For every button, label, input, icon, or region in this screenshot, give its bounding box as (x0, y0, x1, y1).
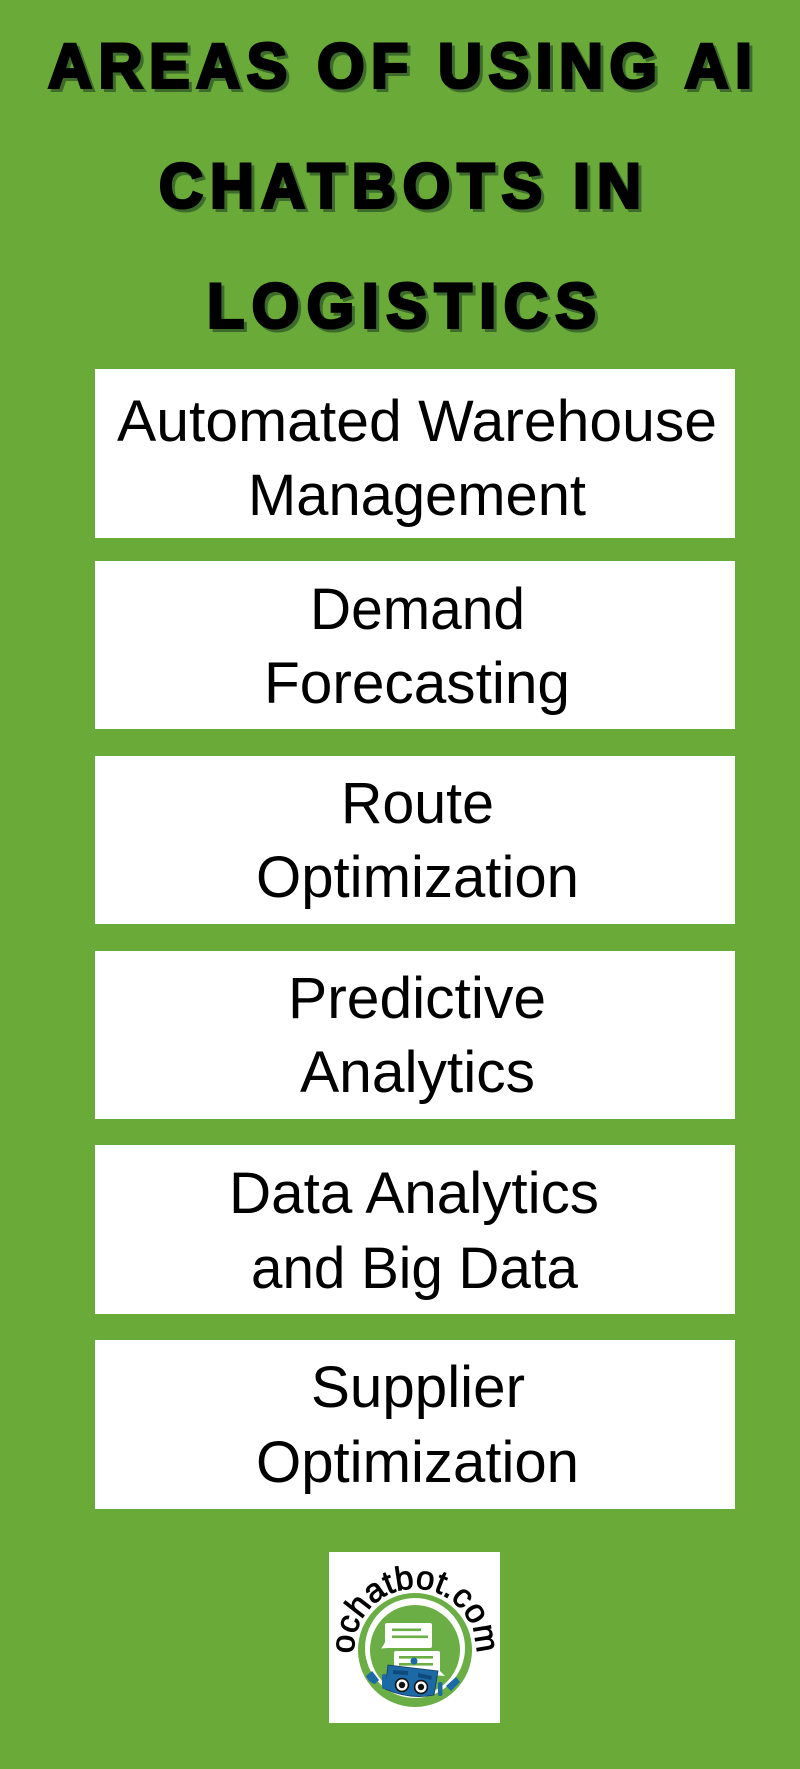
title: CHATBOTS IN (159, 151, 641, 222)
logo wordmark: ochatbot.com (336, 1566, 494, 1652)
panel: automated warehouse management: Management (248, 463, 586, 528)
panel: data analytics and big data: and Big Data (251, 1236, 579, 1301)
chat bubble top (381, 1623, 432, 1648)
panel: supplier optimization: Optimization (256, 1430, 579, 1495)
panel: predictive analytics (95, 951, 735, 1119)
panel: route optimization (95, 756, 735, 924)
panel: route optimization: Route (341, 771, 494, 836)
panel: predictive analytics: Predictive (288, 966, 546, 1031)
title: AREAS OF USING AI (48, 31, 752, 102)
panel: supplier optimization (95, 1340, 735, 1509)
panel: automated warehouse management (95, 369, 735, 538)
panel: data analytics and big data: Data Analytics (229, 1161, 599, 1226)
panel: demand forecasting (95, 561, 735, 729)
panel: route optimization: Optimization (256, 845, 579, 910)
panel: demand forecasting: Forecasting (264, 651, 570, 716)
panel: predictive analytics: Analytics (300, 1040, 535, 1105)
title: LOGISTICS (207, 271, 596, 342)
panel: automated warehouse management: Automated Warehouse (117, 389, 717, 454)
logo: ochatbot.com (329, 1552, 500, 1723)
title (48, 31, 752, 342)
robot mascot (366, 1658, 460, 1697)
chat bubble bottom (394, 1651, 445, 1676)
logo ring (358, 1593, 472, 1707)
panel: data analytics and big data (95, 1145, 735, 1314)
panel: demand forecasting: Demand (310, 577, 525, 642)
panel: supplier optimization: Supplier (311, 1355, 525, 1420)
